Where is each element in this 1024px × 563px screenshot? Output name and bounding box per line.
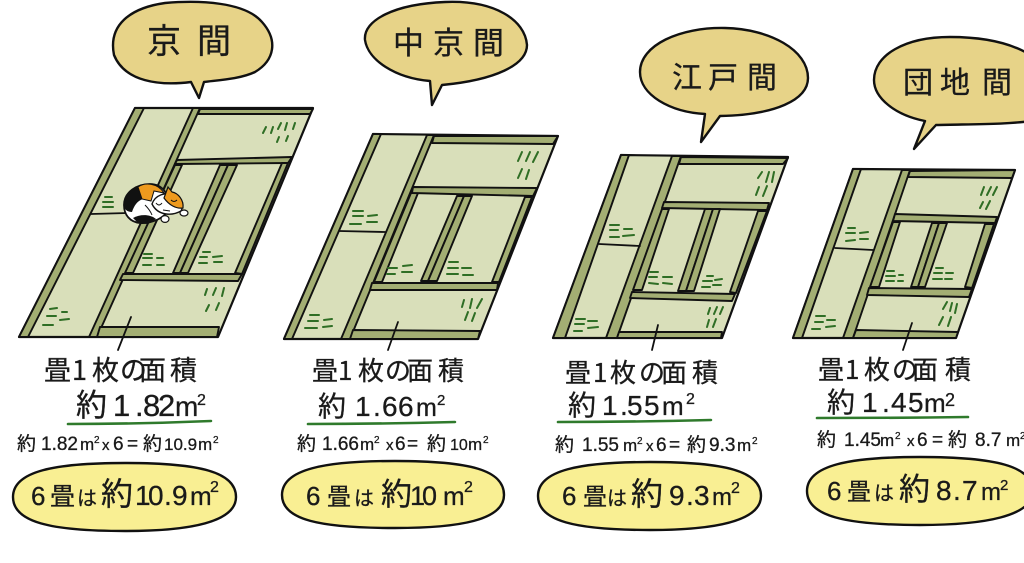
text block: 江戸間 area per mat: 畳1枚の面積 [565,353,718,390]
text block: 団地間 area per mat: m [880,431,894,450]
text block: 団地間 area per mat: 1 [862,387,878,418]
seam line [835,248,873,250]
result pill: 中京間: 0 [422,481,437,511]
text block: 団地間 area per mat: 8.7 [975,430,1001,451]
speech bubble: 京間 [113,2,272,98]
tatami texture ticks [43,123,295,325]
text block: 江戸間 area per mat: m [623,436,637,455]
result pill: 江戸間: は [607,482,627,511]
text block: 京間 area per mat [17,349,219,456]
text block: 京間 area per mat: . [135,388,144,423]
tatami room: 中京間 [284,134,558,339]
tatami edge strips [793,169,1015,338]
text block: 京間 area per mat: 2 [197,392,206,409]
text block: 中京間 area per mat: m [360,435,374,454]
text block: 団地間 area per mat: 約 [817,425,836,452]
text block: 団地間 area per mat: m [1006,431,1020,450]
text block: 京間 area per mat: 畳1枚の面積 [44,349,197,388]
result pill: 団地間: 約 [899,464,930,509]
text block: 京間 area per mat: 2 [94,435,100,446]
text block: 江戸間 area per mat: 2 [637,436,643,447]
tatami texture ticks [812,187,997,329]
result pill: 京間: は [77,482,97,511]
text block: 中京間 area per mat: 約 [427,429,446,456]
text block: 江戸間 area per mat: 6 [656,435,667,456]
text block: 中京間 area per mat [297,351,489,456]
text block: 中京間 area per mat: 2 [483,435,489,446]
text block: 中京間 area per mat: m [468,435,482,454]
leader line: 団地間 [903,323,912,350]
result pill: 団地間: 畳 [847,472,871,507]
result pill: 団地間: 6 [827,476,841,506]
leader line: 江戸間 [652,325,658,350]
text block: 江戸間 area per mat: 5 [644,390,660,421]
speech bubble: 中京間: 中京間 [393,18,504,63]
text block: 団地間 area per mat: 1.45 [844,430,881,451]
text block: 京間 area per mat: 約 [17,429,36,456]
text block: 中京間 area per mat: 6 [395,434,406,455]
text block: 中京間 area per mat: 畳1枚の面積 [312,351,464,388]
result pill: 江戸間: 3 [694,480,710,511]
text block: 江戸間 area per mat: 1.55 [582,435,619,456]
text block: 京間 area per mat: m [175,391,198,422]
result pill: 団地間: 8 [936,475,952,506]
text block: 江戸間 area per mat: 9.3 [709,435,735,456]
result pill: 江戸間: 9 [669,480,685,511]
text block: 京間 area per mat: = [127,434,138,455]
result pill: 団地間: . [953,475,961,506]
text block: 中京間 area per mat: 約 [297,429,316,456]
result pill: 江戸間: 6 [562,481,576,511]
speech bubble: 江戸間: 江戸間 [672,53,777,97]
text block: 京間 area per mat: 1.82 [41,434,78,455]
text block: 江戸間 area per mat: = [669,435,680,456]
result pill: 中京間: 2 [464,479,473,496]
text block: 団地間 area per mat: 2 [895,431,901,442]
tatami edge strips [19,108,313,337]
text block: 京間 area per mat: m [80,435,94,454]
text block: 中京間 area per mat: 10 [450,437,468,454]
result pill: 江戸間: . [686,480,694,511]
text block: 京間 area per mat: 10.9 [164,435,197,454]
tatami room: 団地間 [793,169,1015,338]
tatami room: 江戸間 [553,155,788,338]
speech bubble: 京間: 京間 [147,14,231,63]
text block: 団地間 area per mat: x [907,433,915,450]
text block: 中京間 area per mat: 6 [382,391,398,422]
result pill: 京間: 6 [31,481,45,511]
result pill: 団地間: 2 [1000,477,1008,494]
icon: sleeping calico cat [124,184,188,224]
text block: 団地間 area per mat: m [924,388,946,418]
speech bubble: 団地間: 団地間 [903,58,1012,102]
text block: 中京間 area per mat: . [373,391,381,422]
result pill: 江戸間: 約 [631,469,663,515]
leader line: 中京間 [388,322,398,350]
text block: 団地間 area per mat: = [932,430,943,451]
result pill: 団地間: は [874,477,894,506]
result pill: 京間: 畳 [50,477,75,513]
tatami texture ticks [574,172,774,331]
result pill: 京間: 2 [210,479,219,496]
result pill: 江戸間 [538,462,761,530]
result pill: 江戸間: m [712,484,732,511]
text block: 中京間 area per mat: 1 [355,391,371,422]
text block: 江戸間 area per mat: 2 [686,391,695,408]
text block: 団地間 area per mat: 5 [908,387,924,418]
result pill: 京間: m [190,481,212,511]
seam line [91,213,128,214]
result pill: 中京間: 約 [381,469,412,514]
text block: 江戸間 area per mat: m [737,436,751,455]
text block: 中京間 area per mat: 2 [437,392,445,409]
text block: 京間 area per mat: 2 [213,435,219,446]
text block: 中京間 area per mat: = [407,434,418,455]
text block: 京間 area per mat: 8 [143,388,160,423]
text block: 江戸間 area per mat [555,353,758,457]
text block: 江戸間 area per mat: 1 [602,390,618,421]
text block: 京間 area per mat: 2 [158,388,175,423]
text block: 江戸間 area per mat: 約 [568,384,596,424]
text block: 京間 area per mat: m [198,435,212,454]
text block: 江戸間 area per mat: 5 [627,390,643,421]
text block: 中京間 area per mat: 約 [318,385,346,425]
text block: 中京間 area per mat: 6 [398,391,414,422]
result pill: 江戸間: 畳 [583,477,607,512]
text block: 中京間 area per mat: 1.66 [322,434,359,455]
result pill: 京間: . [164,480,172,511]
text block: 京間 area per mat: x [102,437,110,454]
text block: 中京間 area per mat: m [416,394,437,422]
tatami edge strips [284,134,558,339]
result pill: 京間: 約 [101,469,133,515]
seam line [599,244,640,246]
result pill: 団地間 [807,457,1024,525]
text block: 江戸間 area per mat: m [662,391,684,421]
seam line [339,231,385,232]
tatami edge strips [553,155,788,338]
text block: 団地間 area per mat: 4 [891,387,907,418]
text block: 江戸間 area per mat: 2 [752,436,758,447]
result pill: 京間 [13,463,236,531]
text block: 中京間 area per mat: 2 [374,435,380,446]
result pill: 中京間: 畳 [327,477,351,512]
result pill: 団地間: m [981,479,1001,506]
text block: 江戸間 area per mat: 約 [555,430,574,457]
text block: 京間 area per mat: 約 [76,380,107,425]
result pill: 中京間 [282,461,504,528]
speech bubble: 江戸間 [640,28,808,142]
text block: 団地間 area per mat: 畳1枚の面積 [818,350,971,387]
text block: 団地間 area per mat: 約 [948,425,967,452]
result pill: 中京間: 6 [306,481,320,511]
leader line: 京間 [118,317,131,350]
speech bubble: 中京間 [365,2,527,105]
text block: 江戸間 area per mat: . [620,390,628,421]
result pill: 中京間: m [443,481,465,511]
result pill: 団地間: 7 [962,475,978,506]
text block: 団地間 area per mat: 約 [827,381,855,421]
text block: 京間 area per mat: 1 [113,388,130,423]
text block: 団地間 area per mat: 6 [917,430,928,451]
text block: 中京間 area per mat: x [386,437,394,454]
result pill: 中京間: は [354,482,374,511]
text block: 京間 area per mat: 6 [113,434,124,455]
text block: 江戸間 area per mat: 約 [687,430,706,457]
text block: 団地間 area per mat [817,350,1024,452]
text block: 京間 area per mat: 約 [143,429,162,456]
tatami room: 京間 [19,108,313,337]
result pill: 京間: 1 [135,480,151,511]
text block: 団地間 area per mat: 2 [945,390,955,410]
text block: 団地間 area per mat: . [882,387,890,418]
result pill: 江戸間: 2 [731,480,740,497]
speech bubble: 団地間 [874,37,1024,149]
text block: 江戸間 area per mat: x [646,438,654,455]
result pill: 京間: 9 [172,480,188,511]
tatami texture ticks [305,152,538,328]
result pill: 中京間: 1 [410,481,425,511]
result pill: 京間: 0 [148,480,164,511]
